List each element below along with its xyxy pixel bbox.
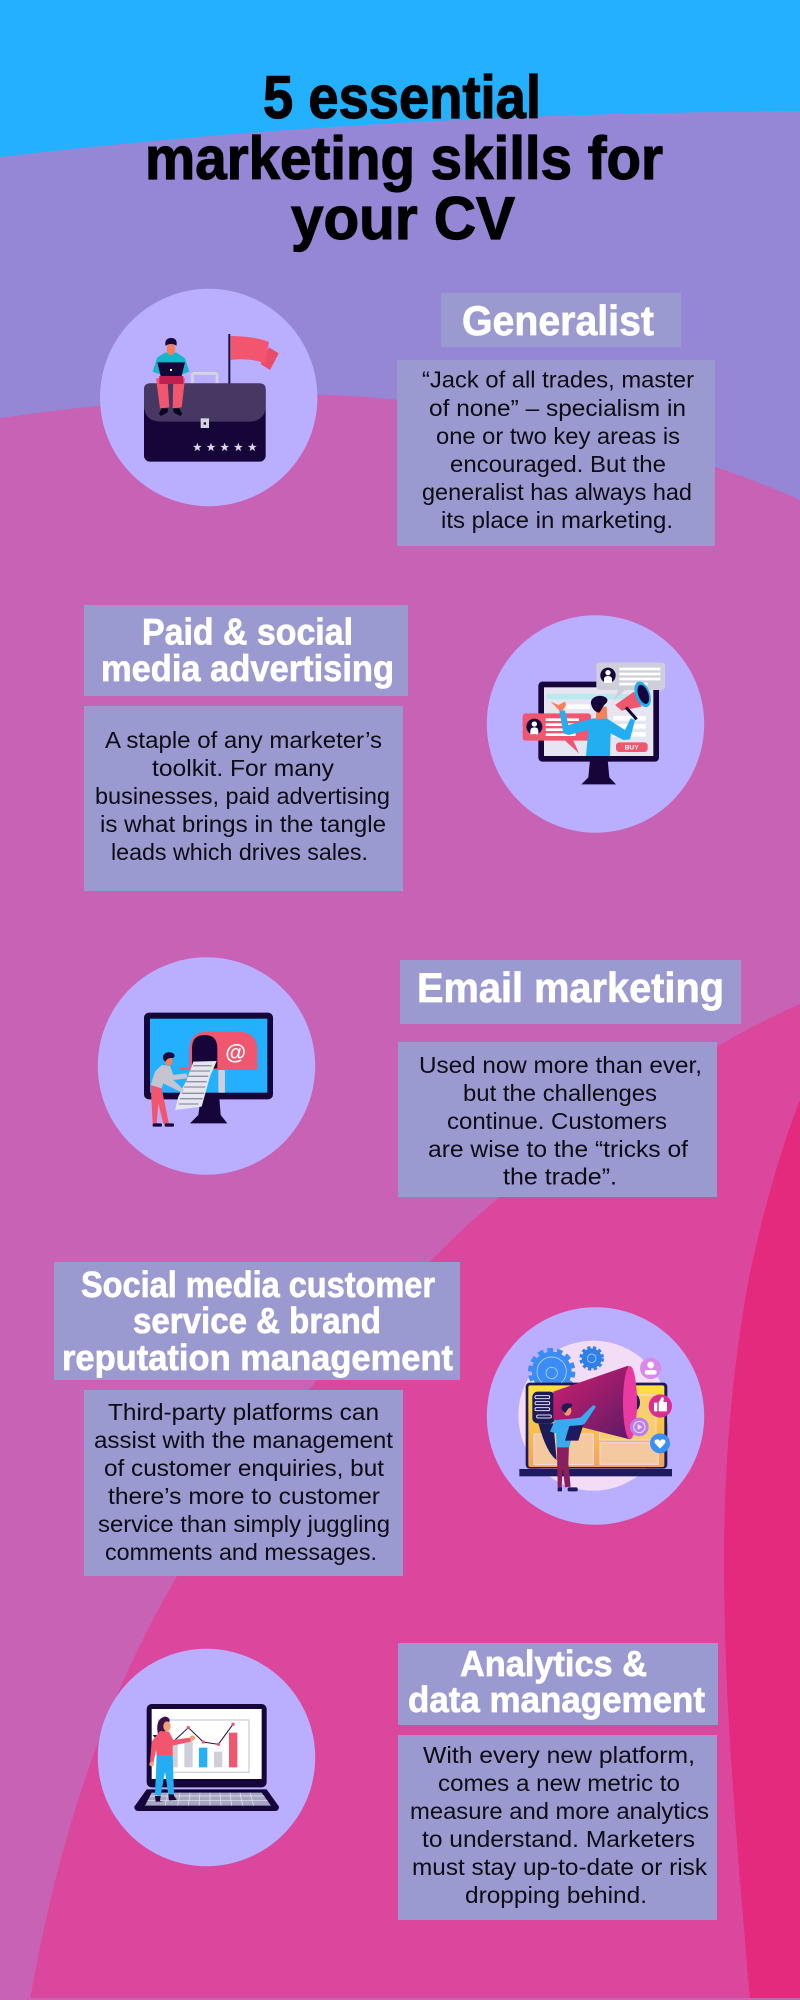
text block: customer service description: assist with the management [94, 1427, 394, 1453]
text block: generalist description [397, 360, 715, 546]
heading: Email marketing [400, 960, 741, 1024]
title [145, 64, 663, 252]
panel: paid and social media advertising [84, 605, 704, 891]
heading: social media customer service and brand reputation: service & brand [133, 1300, 381, 1341]
text block: generalist description: its place in marketing. [441, 507, 673, 533]
text block: customer service description: of customer enquiries, but [104, 1455, 385, 1481]
text block: generalist description: “Jack of all trades, master [422, 366, 694, 392]
text block: email description: are wise to the “tricks of [428, 1136, 689, 1162]
text block: advertising description: is what brings in the tangle [100, 811, 386, 837]
icon circle: monitor and mailbox [98, 957, 315, 1175]
heading: paid and social media advertising: media advertising [101, 648, 394, 689]
text block: generalist description: encouraged. But the [450, 451, 666, 477]
heading: social media customer service and brand reputation: Social media customer [81, 1264, 435, 1305]
heading: Generalist: Generalist [462, 297, 654, 344]
icon circle: monitor and megaphone [487, 615, 704, 833]
panel: social media customer service [54, 1262, 704, 1576]
text block: email description: but the challenges [463, 1080, 657, 1106]
heading: paid and social media advertising [84, 605, 408, 696]
icon circle: laptop with chart [98, 1649, 315, 1866]
icon circle: briefcase and flag [100, 289, 317, 506]
text block: analytics description: With every new platform, [423, 1742, 695, 1768]
text block: generalist description: of none” – specialism in [429, 395, 686, 421]
text block: email description: continue. Customers [447, 1108, 667, 1134]
title: 5 essential [263, 64, 541, 131]
text block: generalist description: generalist has always had [422, 479, 692, 505]
text block: customer service description [84, 1390, 403, 1576]
heading: analytics and data management [398, 1643, 718, 1725]
heading: analytics and data management: Analytics & [460, 1643, 647, 1684]
icon circle: monitor and megaphone: BUY [625, 744, 639, 751]
panel: analytics and data management [98, 1643, 718, 1920]
text block: advertising description: A staple of any marketer’s [105, 727, 382, 753]
text block: analytics description: dropping behind. [465, 1882, 647, 1908]
text block: customer service description: Third-party platforms can [108, 1399, 379, 1425]
panel: generalist [100, 289, 715, 546]
text block: advertising description: toolkit. For many [152, 755, 335, 781]
text block: analytics description: measure and more analytics [410, 1798, 709, 1824]
text block: advertising description: businesses, paid advertising [95, 783, 390, 809]
text block: email description: the trade”. [503, 1164, 617, 1190]
text block: customer service description: service than simply juggling [98, 1511, 390, 1537]
title: your CV [291, 185, 515, 252]
text block: customer service description: there’s more to customer [108, 1483, 380, 1509]
text block: email description [398, 1042, 717, 1197]
panel: email marketing [98, 957, 741, 1197]
text block: analytics description: comes a new metric to [438, 1770, 680, 1796]
text block: email description: Used now more than ever, [419, 1052, 702, 1078]
text block: analytics description: must stay up-to-date or risk [412, 1854, 708, 1880]
text block: advertising description: leads which drives sales. [111, 839, 368, 865]
heading: social media customer service and brand reputation [54, 1262, 460, 1380]
text block: customer service description: comments and messages. [105, 1539, 377, 1565]
heading: Email marketing: Email marketing [417, 964, 724, 1011]
text block: analytics description [398, 1735, 717, 1920]
heading: paid and social media advertising: Paid & social [142, 612, 353, 652]
text block: analytics description: to understand. Marketers [422, 1826, 695, 1852]
heading: analytics and data management: data management [408, 1679, 705, 1720]
heading: social media customer service and brand reputation: reputation management [62, 1337, 453, 1378]
icon circle: monitor and mailbox: @ [225, 1040, 246, 1064]
text block: advertising description [84, 706, 403, 891]
icon circle: giant megaphone and laptop [487, 1307, 704, 1525]
title: marketing skills for [145, 125, 663, 192]
text block: generalist description: one or two key areas is [436, 423, 680, 449]
